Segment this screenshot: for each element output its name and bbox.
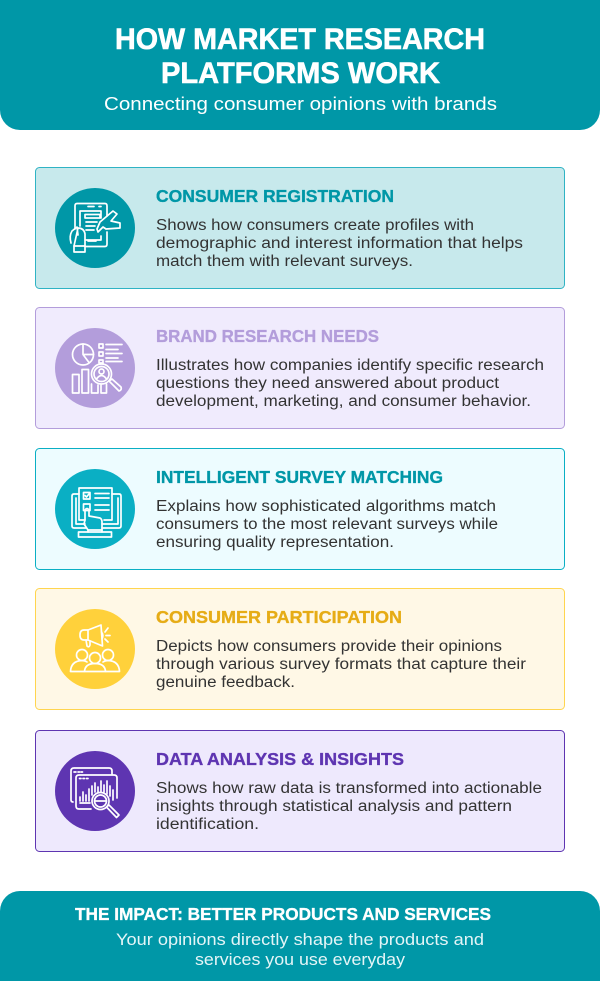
description bbox=[156, 780, 542, 833]
footer banner bbox=[0, 891, 600, 981]
description: match them with relevant surveys. bbox=[156, 253, 413, 270]
description: ensuring quality representation. bbox=[156, 534, 394, 551]
footer heading: THE IMPACT: BETTER PRODUCTS AND SERVICES bbox=[75, 904, 491, 924]
heading: DATA ANALYSIS & INSIGHTS bbox=[156, 749, 404, 769]
icon: megaphone and people bbox=[55, 609, 135, 689]
icon: tablet form and hands bbox=[55, 188, 135, 268]
description: Shows how consumers create profiles with bbox=[156, 217, 474, 234]
panel: intelligent survey matching bbox=[36, 448, 564, 570]
panel: data analysis and insights bbox=[36, 730, 564, 852]
subtitle: Connecting consumer opinions with brands bbox=[104, 93, 497, 114]
title: HOW MARKET RESEARCH bbox=[115, 23, 485, 56]
description: genuine feedback. bbox=[156, 674, 295, 691]
description: Explains how sophisticated algorithms match bbox=[156, 498, 496, 515]
panel: consumer registration bbox=[36, 168, 564, 288]
description: insights through statistical analysis and pattern bbox=[156, 798, 512, 815]
description: development, marketing, and consumer behavior. bbox=[156, 393, 531, 410]
footer text: Your opinions directly shape the products and bbox=[116, 931, 484, 949]
panel: consumer participation bbox=[36, 588, 564, 710]
heading: BRAND RESEARCH NEEDS bbox=[156, 326, 379, 346]
heading: CONSUMER PARTICIPATION bbox=[156, 607, 402, 627]
description: identification. bbox=[156, 816, 259, 833]
description bbox=[156, 357, 544, 410]
heading: CONSUMER REGISTRATION bbox=[156, 186, 394, 206]
icon: charts and magnifier bbox=[55, 328, 135, 408]
description: demographic and interest information that helps bbox=[156, 235, 523, 252]
description: Shows how raw data is transformed into actionable bbox=[156, 780, 542, 797]
icon: data windows and magnifier bbox=[55, 751, 135, 831]
heading: INTELLIGENT SURVEY MATCHING bbox=[156, 467, 443, 487]
footer text bbox=[116, 931, 484, 969]
description: questions they need answered about product bbox=[156, 375, 500, 392]
description: consumers to the most relevant surveys while bbox=[156, 516, 498, 533]
icon: survey on monitor with pointing hand bbox=[55, 469, 135, 549]
panel: brand research needs bbox=[36, 308, 564, 428]
description: Depicts how consumers provide their opinions bbox=[156, 638, 502, 655]
description bbox=[156, 498, 498, 551]
title: PLATFORMS WORK bbox=[161, 57, 440, 90]
description: through various survey formats that capture their bbox=[156, 656, 526, 673]
description bbox=[156, 638, 526, 691]
description: Illustrates how companies identify specific research bbox=[156, 357, 544, 374]
header banner bbox=[0, 0, 600, 130]
footer text: services you use everyday bbox=[195, 951, 406, 969]
title bbox=[115, 23, 485, 90]
description bbox=[156, 217, 523, 270]
